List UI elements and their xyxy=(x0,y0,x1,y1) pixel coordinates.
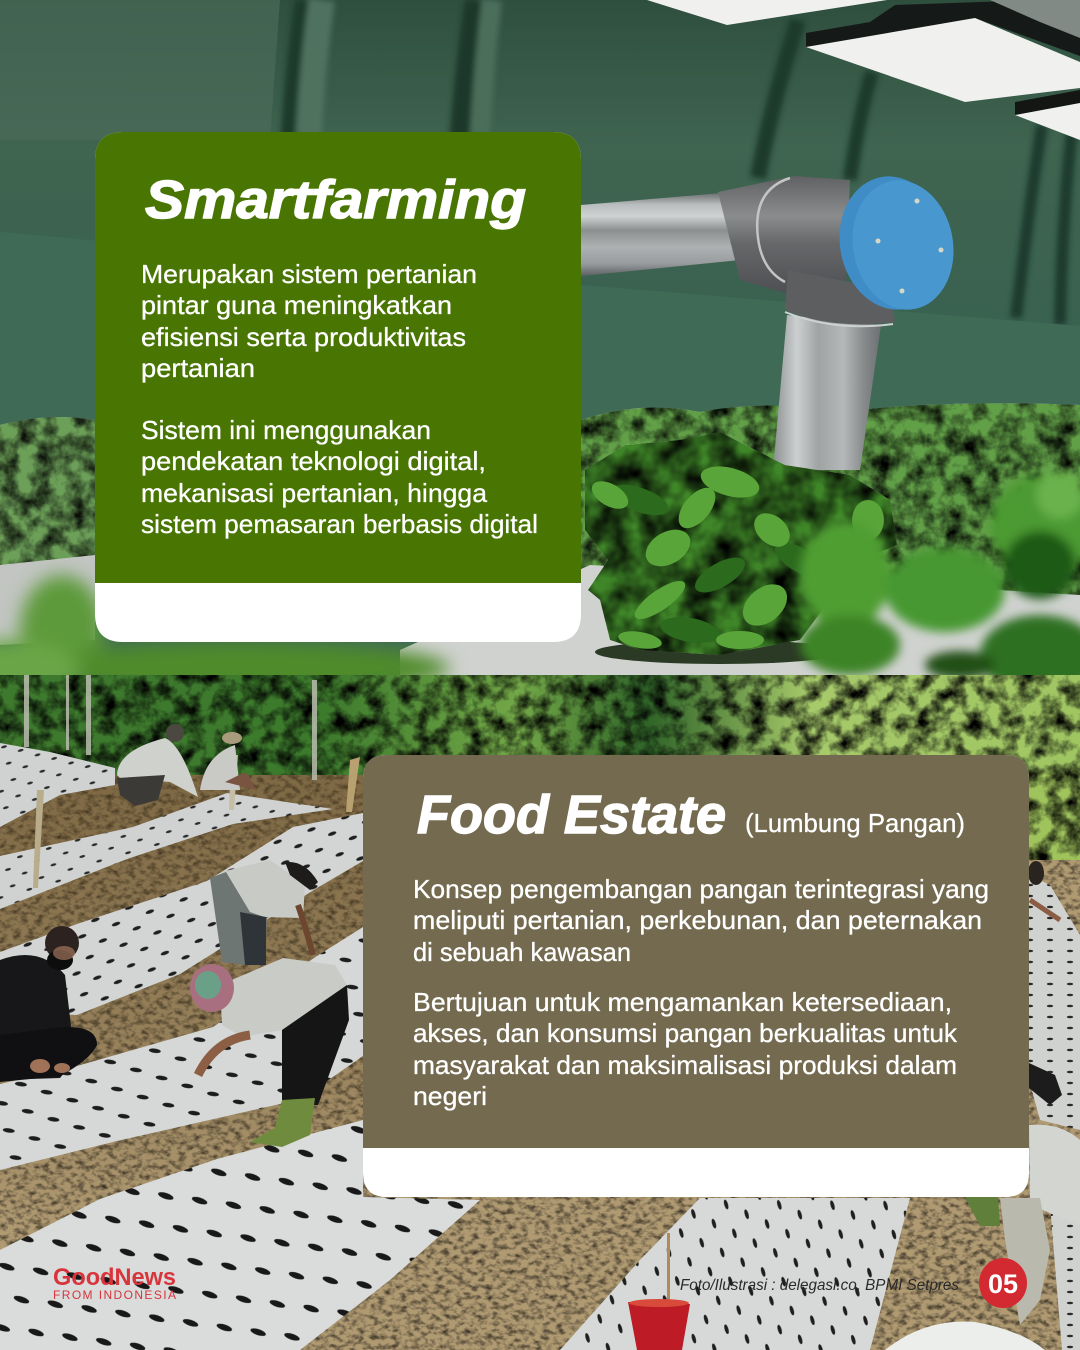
worker: bent middle xyxy=(210,860,318,965)
white planter table xyxy=(0,555,1080,675)
front plant xyxy=(585,432,897,655)
upper wall with arches xyxy=(271,0,1080,325)
robot arm xyxy=(581,168,964,470)
worker: squatting second xyxy=(200,732,257,790)
heading: food estate: Food Estate xyxy=(417,785,726,845)
foreground blurred plant left xyxy=(0,575,450,700)
text: smartfarming definition: efisiensi serta produktivitas xyxy=(141,322,466,352)
text: smartfarming approach: Sistem ini menggunakan xyxy=(141,415,431,445)
text: food estate objective: Bertujuan untuk mengamankan ketersediaan, xyxy=(413,987,952,1017)
text: food estate concept: di sebuah kawasan xyxy=(413,937,631,967)
foreground blurred plant right xyxy=(800,471,1080,695)
stakes xyxy=(33,755,360,888)
text: smartfarming definition xyxy=(141,259,477,383)
ceiling lights xyxy=(647,0,1080,140)
photo: food estate field xyxy=(0,675,1080,1350)
workers xyxy=(0,724,1080,1350)
back row plants xyxy=(0,403,1080,600)
text: smartfarming definition: pintar guna meningkatkan xyxy=(141,290,452,320)
heading: smartfarming: Smartfarming xyxy=(145,170,526,230)
text: food estate objective: masyarakat dan maksimalisasi produksi dalam xyxy=(413,1050,957,1080)
text: food estate concept: Konsep pengembangan pangan terintegrasi yang xyxy=(413,874,989,904)
page number badge xyxy=(979,1258,1027,1308)
plastic mulch strips xyxy=(0,743,1080,1350)
text: smartfarming definition: Merupakan sistem pertanian xyxy=(141,259,477,289)
text: food estate objective: negeri xyxy=(413,1081,487,1111)
text: smartfarming approach xyxy=(141,415,538,539)
subheading: lumbung pangan: (Lumbung Pangan) xyxy=(745,808,965,838)
logo: goodnews from indonesia: GoodNews xyxy=(53,1264,176,1291)
text: smartfarming approach: mekanisasi pertanian, hingga xyxy=(141,478,488,508)
panel: smartfarming xyxy=(95,132,581,642)
worker: bent front xyxy=(190,958,349,1147)
red cup on stick xyxy=(628,1233,690,1350)
page number badge: 05 xyxy=(988,1269,1018,1299)
text: food estate concept xyxy=(413,874,989,967)
logo: goodnews from indonesia: FROM INDONESIA xyxy=(53,1288,176,1302)
forest background xyxy=(0,675,1080,860)
text: food estate objective: akses, dan konsumsi pangan berkualitas untuk xyxy=(413,1018,958,1048)
photo: smart farm with robot arm xyxy=(0,0,1080,700)
panel: food estate xyxy=(363,755,1029,1197)
worker: squatting back xyxy=(117,724,198,806)
text: food estate concept: meliputi pertanian, perkebunan, dan peternakan xyxy=(413,905,982,935)
worker: right edge xyxy=(885,861,1080,1350)
text: smartfarming definition: pertanian xyxy=(141,353,255,383)
photo credit: Foto/Ilustrasi : delegasi.co, BPMI Setpres xyxy=(680,1277,959,1294)
text: food estate objective xyxy=(413,987,958,1111)
text: smartfarming approach: pendekatan teknologi digital, xyxy=(141,446,486,476)
text: smartfarming approach: sistem pemasaran berbasis digital xyxy=(141,509,538,539)
worker: seated black jacket xyxy=(0,926,97,1082)
